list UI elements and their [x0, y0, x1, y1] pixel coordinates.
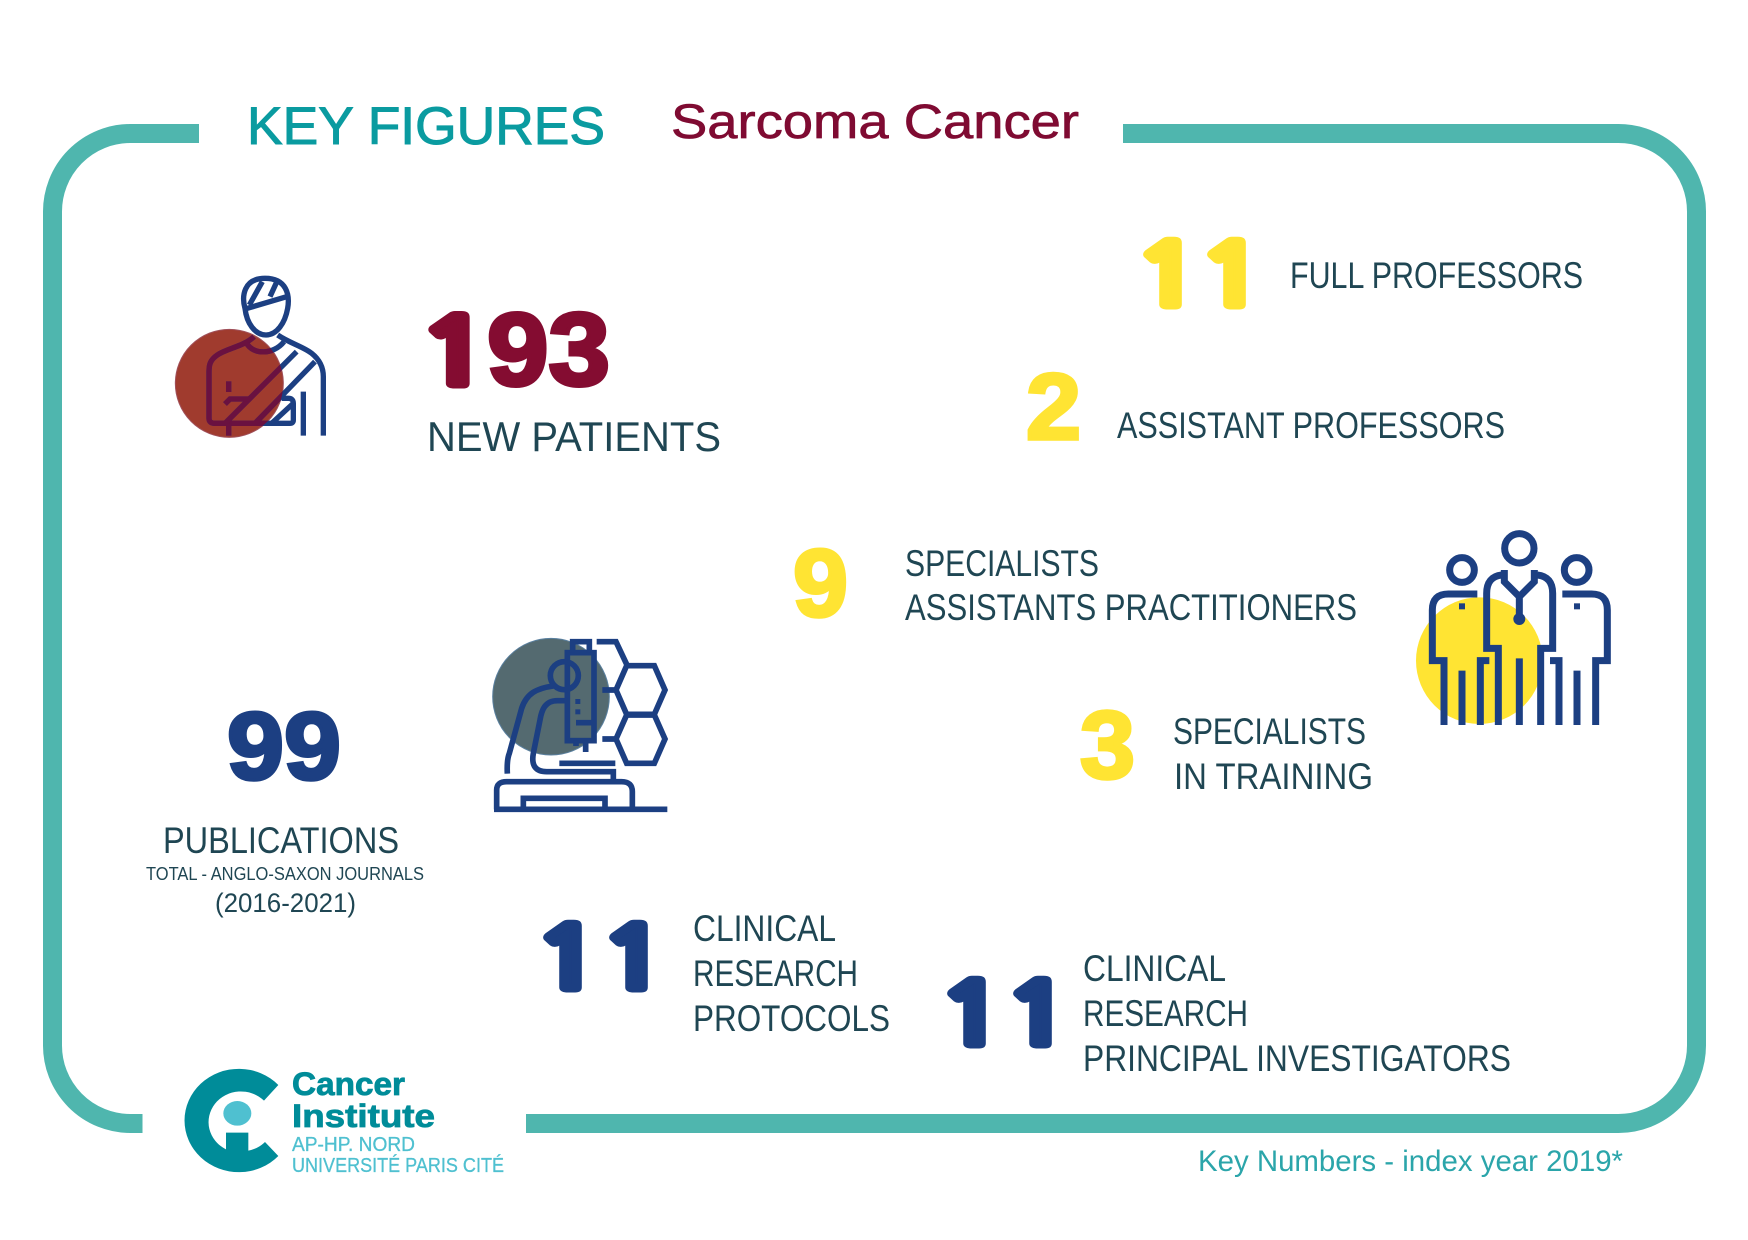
label: clinical research protocols: RESEARCH [693, 953, 858, 994]
label: publications: TOTAL - ANGLO-SAXON JOURNALS [146, 864, 424, 884]
rounded frame [52, 133, 1697, 1124]
label: assistant professors: ASSISTANT PROFESSORS [1117, 405, 1505, 446]
logo wordmark [292, 1066, 504, 1177]
logo wordmark: AP-HP. NORD [292, 1134, 415, 1156]
number: 11 full professors: 1 [1134, 234, 1202, 318]
subtitle: sarcoma cancer: Sarcoma Cancer [671, 96, 1079, 149]
label: clinical research protocols [693, 908, 890, 1039]
label: publications: (2016-2021) [215, 888, 356, 918]
logo: cancer institute [185, 1066, 504, 1177]
number: 99: 99 [227, 693, 341, 800]
number: 11 full professors [1134, 234, 1266, 318]
label: full professors: FULL PROFESSORS [1290, 255, 1583, 296]
label: specialists assistants practitioners: SPECIALISTS [905, 543, 1099, 584]
label: publications: PUBLICATIONS [163, 820, 399, 861]
label: specialists in training: IN TRAINING [1174, 756, 1373, 797]
number: 11 principal investigators: 1 [938, 973, 1006, 1057]
number: 11 clinical research protocols [534, 917, 668, 1001]
number: 11 clinical research protocols: 1 [534, 917, 602, 1001]
icon: microscope [493, 638, 667, 809]
title: key figures: KEY FIGURES [247, 97, 605, 156]
label: clinical research principal investigators [1083, 948, 1511, 1079]
label: specialists in training: SPECIALISTS [1173, 711, 1366, 752]
label: publications [146, 820, 424, 918]
number: 193 [418, 292, 610, 407]
label: clinical research principal investigators: CLINICAL [1083, 948, 1226, 989]
number: 11 clinical research protocols: 1 [600, 917, 668, 1001]
icon: injured patient [175, 278, 323, 437]
label: clinical research principal investigators: RESEARCH [1083, 993, 1248, 1034]
footnote: Key Numbers - index year 2019* [1198, 1145, 1623, 1178]
number: 3 specialists in training: 3 [1080, 692, 1135, 799]
label: clinical research protocols: CLINICAL [693, 908, 836, 949]
label: specialists in training [1173, 711, 1373, 797]
number: 11 principal investigators: 1 [1004, 973, 1072, 1057]
label: new patients: NEW PATIENTS [427, 413, 721, 460]
number: 9 specialists: 9 [793, 530, 848, 637]
number: 11 full professors: 1 [1198, 234, 1266, 318]
logo wordmark: Cancer [292, 1066, 405, 1102]
number: 11 principal investigators [938, 973, 1072, 1057]
logo wordmark: UNIVERSITÉ PARIS CITÉ [292, 1154, 504, 1177]
icon: medical team [1416, 534, 1607, 725]
logo mark [185, 1069, 278, 1172]
label: specialists assistants practitioners: ASSISTANTS PRACTITIONERS [905, 587, 1357, 628]
logo wordmark: Institute [292, 1098, 435, 1134]
number: 193: 1 [418, 307, 492, 398]
label: clinical research principal investigators: PRINCIPAL INVESTIGATORS [1083, 1038, 1511, 1079]
label: specialists assistants practitioners [905, 543, 1357, 628]
number: 193: 93 [487, 292, 610, 407]
label: clinical research protocols: PROTOCOLS [693, 998, 890, 1039]
number: 2 assistant professors: 2 [1026, 354, 1081, 459]
